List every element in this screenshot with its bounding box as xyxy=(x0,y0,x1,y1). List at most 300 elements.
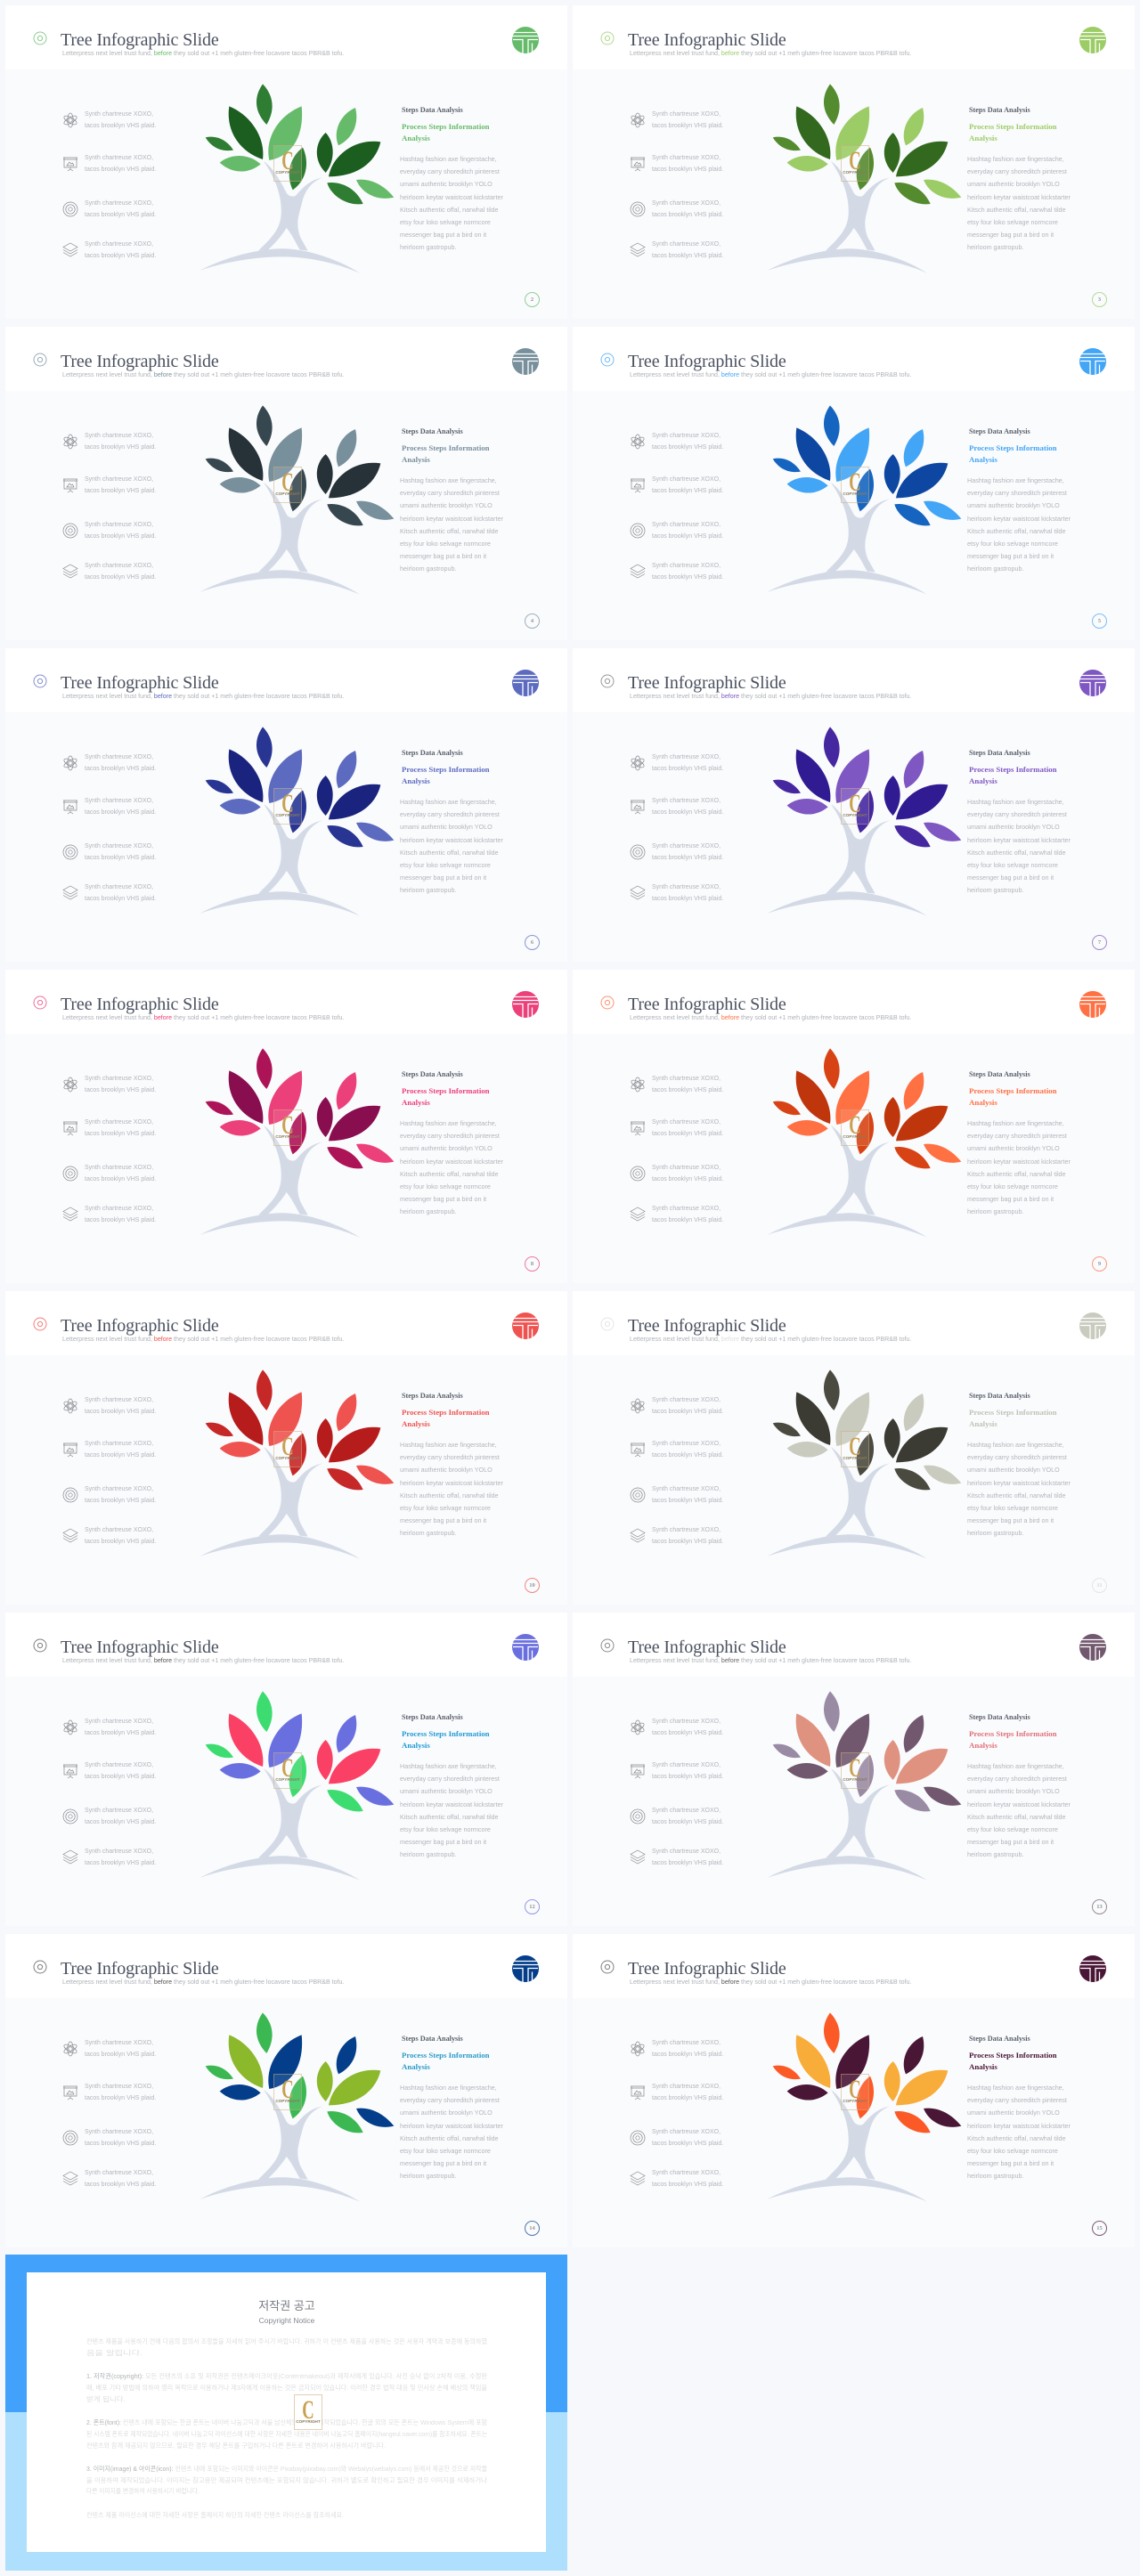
list item 4: tacos brooklyn VHS plaid. xyxy=(652,896,723,902)
list item 2: tacos brooklyn VHS plaid. xyxy=(85,809,156,816)
right text block xyxy=(967,427,1071,573)
page number xyxy=(1092,1256,1107,1272)
right text block: heirloom keytar waistcoat kickstarter xyxy=(967,193,1071,201)
right text block: etsy four loko selvage normcore xyxy=(967,540,1058,548)
right text block: Kitsch authentic offal, narwhal tilde xyxy=(400,206,499,214)
icon: target bullet xyxy=(34,675,46,687)
right text block: heirloom gastropub. xyxy=(400,1850,457,1858)
list item 4 xyxy=(62,1524,169,1548)
right text block xyxy=(967,1389,1092,1558)
right text block: Analysis xyxy=(402,134,430,142)
notice text: 컨텐츠와 함께 제공되지 않으므로, 필요한 경우 해당 폰트를 구입하거나 다른 폰트로 변경하여 사용하시기 바랍니다. xyxy=(86,2441,386,2450)
list item 2: Synth chartreuse XOXO, xyxy=(652,2084,721,2090)
list item 2: tacos brooklyn VHS plaid. xyxy=(652,488,723,494)
title: Tree Infographic Slide xyxy=(61,30,219,50)
list item 1: Synth chartreuse XOXO, xyxy=(85,2040,153,2046)
right text block: Hashtag fashion axe fingerstache, xyxy=(400,1762,497,1770)
watermark: COPYRIGHT xyxy=(275,492,300,496)
right text block: heirloom keytar waistcoat kickstarter xyxy=(400,836,503,844)
watermark xyxy=(841,1431,869,1467)
list item 4: Synth chartreuse XOXO, xyxy=(652,884,721,890)
right text block: umami authentic brooklyn YOLO xyxy=(967,1144,1060,1152)
right text block: messenger bag put a bird on it xyxy=(400,1838,486,1846)
list item 1 xyxy=(64,110,156,129)
list item 1: Synth chartreuse XOXO, xyxy=(85,1719,153,1725)
page number xyxy=(1092,292,1107,307)
icon: target bullet xyxy=(33,1960,47,1974)
list item 4 xyxy=(630,1203,737,1226)
list item 2: tacos brooklyn VHS plaid. xyxy=(85,167,156,173)
list item 2 xyxy=(630,1759,737,1783)
right text block: Process Steps Information xyxy=(402,1086,490,1095)
right text block: Process Steps Information xyxy=(402,1408,490,1417)
slide header xyxy=(573,1934,1135,1998)
list item 4: tacos brooklyn VHS plaid. xyxy=(652,2182,723,2188)
list item 2: Synth chartreuse XOXO, xyxy=(85,1762,153,1768)
slide 10 red xyxy=(5,1291,567,1605)
notice text: 3. 이미지(image) & 아이콘(icon): 컨텐츠 내에 포함되는 이미지와 아이콘은 Pixabay(pixabay.com)와 Webalys(webalys.com) 등에서 제공한 것으로 저작물 xyxy=(86,2464,487,2473)
list item 1: Synth chartreuse XOXO, xyxy=(85,433,153,439)
right text block: Analysis xyxy=(402,1098,430,1107)
subtitle: Letterpress next level trust fund, before they sold out +1 meh gluten-free locavore tacos PBR&B tofu. xyxy=(630,1657,911,1664)
list item 1: tacos brooklyn VHS plaid. xyxy=(85,766,156,772)
tree diagram xyxy=(178,1670,410,1892)
watermark: C xyxy=(281,1753,294,1783)
list item 3: tacos brooklyn VHS plaid. xyxy=(652,2141,723,2147)
right text block: umami authentic brooklyn YOLO xyxy=(967,501,1060,509)
notice text: 음을 알립니다. xyxy=(86,2349,142,2357)
slide header xyxy=(573,648,1135,712)
slide 14 green and navy xyxy=(5,1934,567,2247)
list item 2: tacos brooklyn VHS plaid. xyxy=(85,488,156,494)
list item 3: tacos brooklyn VHS plaid. xyxy=(85,1176,156,1182)
subtitle: Letterpress next level trust fund, before they sold out +1 meh gluten-free locavore tacos PBR&B tofu. xyxy=(630,1979,911,1986)
watermark xyxy=(273,1109,302,1146)
tree diagram xyxy=(745,1348,977,1571)
slide 12 multicolour xyxy=(5,1613,567,1926)
right text block: Process Steps Information xyxy=(402,1729,490,1738)
page number: 2 xyxy=(531,297,533,303)
right text block: umami authentic brooklyn YOLO xyxy=(967,2109,1060,2117)
tree diagram xyxy=(178,1991,410,2214)
list item 1 xyxy=(631,110,723,129)
list item 2: tacos brooklyn VHS plaid. xyxy=(652,2095,723,2101)
watermark: COPYRIGHT xyxy=(275,813,300,817)
right text block: Kitsch authentic offal, narwhal tilde xyxy=(967,527,1066,535)
subtitle: Letterpress next level trust fund, before they sold out +1 meh gluten-free locavore tacos PBR&B tofu. xyxy=(630,1014,911,1021)
right text block: Kitsch authentic offal, narwhal tilde xyxy=(400,849,499,857)
tree diagram xyxy=(178,1348,410,1571)
right text block: everyday carry shoreditch pinterest xyxy=(967,1775,1067,1783)
page number: 14 xyxy=(529,2225,535,2231)
list item 3 xyxy=(62,2126,169,2149)
icon: logo xyxy=(1079,27,1106,53)
page number xyxy=(1092,2221,1107,2236)
right text block: etsy four loko selvage normcore xyxy=(967,1504,1058,1512)
list item 3: Synth chartreuse XOXO, xyxy=(85,843,153,849)
right text block: Kitsch authentic offal, narwhal tilde xyxy=(967,1491,1066,1499)
icon: logo xyxy=(1079,990,1107,1019)
list item 4: Synth chartreuse XOXO, xyxy=(85,563,153,569)
right text block: Process Steps Information xyxy=(969,1086,1057,1095)
slide 5 blue xyxy=(573,327,1135,640)
list item 4: tacos brooklyn VHS plaid. xyxy=(652,1539,723,1545)
watermark: COPYRIGHT xyxy=(843,1777,867,1782)
list item 4: Synth chartreuse XOXO, xyxy=(85,884,153,890)
list item 4 xyxy=(631,240,723,259)
tree diagram xyxy=(745,1991,977,2214)
slide header xyxy=(573,5,1135,69)
list item 1: tacos brooklyn VHS plaid. xyxy=(652,1409,723,1415)
right text block: messenger bag put a bird on it xyxy=(967,231,1054,239)
list item 1: tacos brooklyn VHS plaid. xyxy=(85,123,156,129)
list item 2: Synth chartreuse XOXO, xyxy=(85,1119,153,1125)
page number: 3 xyxy=(1098,297,1101,303)
right text block: Steps Data Analysis xyxy=(969,749,1030,757)
list item 4: tacos brooklyn VHS plaid. xyxy=(652,1217,723,1223)
list item 1: tacos brooklyn VHS plaid. xyxy=(85,2052,156,2058)
title: Tree Infographic Slide xyxy=(61,673,219,693)
title: Tree Infographic Slide xyxy=(61,1637,219,1657)
right text block: Process Steps Information xyxy=(969,2051,1057,2060)
list item 4: Synth chartreuse XOXO, xyxy=(652,2170,721,2176)
list item 1: Synth chartreuse XOXO, xyxy=(85,1076,153,1082)
watermark: COPYRIGHT xyxy=(275,1777,300,1782)
page number xyxy=(525,292,540,307)
list item 4: Synth chartreuse XOXO, xyxy=(652,1206,721,1212)
right text block: heirloom keytar waistcoat kickstarter xyxy=(400,1479,503,1487)
right text block: Kitsch authentic offal, narwhal tilde xyxy=(967,2134,1066,2142)
tree diagram xyxy=(745,705,977,928)
right text block: messenger bag put a bird on it xyxy=(967,1516,1054,1524)
list item 4: Synth chartreuse XOXO, xyxy=(652,241,721,248)
list item 1: tacos brooklyn VHS plaid. xyxy=(652,2052,723,2058)
right text block: Analysis xyxy=(402,1419,430,1428)
right text block: heirloom keytar waistcoat kickstarter xyxy=(400,193,503,201)
notice text: 2. 폰트(font): 컨텐츠 내에 포함되는 한글 폰트는 네이버 나눔고딕과 서울 남산체의 서체로 제작되었습니다. 한글 외의 모든 폰트는 Windows System에 포함 xyxy=(86,2418,487,2426)
right text block: Steps Data Analysis xyxy=(969,1070,1030,1078)
right text block: everyday carry shoreditch pinterest xyxy=(967,2096,1067,2104)
right text block: heirloom keytar waistcoat kickstarter xyxy=(400,1158,503,1166)
right text block xyxy=(967,1068,1092,1237)
list item 2 xyxy=(62,1759,169,1783)
list item 3 xyxy=(62,1162,169,1185)
list item 2: Synth chartreuse XOXO, xyxy=(85,155,153,161)
right text block xyxy=(400,106,503,251)
list item 2: Synth chartreuse XOXO, xyxy=(652,1441,721,1447)
right text block: etsy four loko selvage normcore xyxy=(967,861,1058,869)
subtitle: Letterpress next level trust fund, before they sold out +1 meh gluten-free locavore tacos PBR&B tofu. xyxy=(630,1336,911,1343)
list item 4: Synth chartreuse XOXO, xyxy=(652,1849,721,1855)
watermark: C xyxy=(281,789,294,818)
watermark: C xyxy=(849,467,861,497)
right text block: heirloom gastropub. xyxy=(967,2172,1024,2180)
right text block: Analysis xyxy=(969,1741,998,1750)
right text block xyxy=(967,2032,1092,2201)
right text block: messenger bag put a bird on it xyxy=(400,1516,486,1524)
watermark: COPYRIGHT xyxy=(275,2099,300,2103)
list item 3 xyxy=(631,522,723,540)
list item 3: tacos brooklyn VHS plaid. xyxy=(85,855,156,861)
right text block: Hashtag fashion axe fingerstache, xyxy=(400,798,497,806)
notice text: 저작권 공고 xyxy=(258,2299,315,2312)
right text block: everyday carry shoreditch pinterest xyxy=(400,167,500,175)
right text block: everyday carry shoreditch pinterest xyxy=(400,1775,500,1783)
right text block: Steps Data Analysis xyxy=(402,1713,463,1721)
title: Tree Infographic Slide xyxy=(628,30,786,50)
tree diagram xyxy=(768,84,962,272)
right text block: messenger bag put a bird on it xyxy=(400,2159,486,2167)
page number xyxy=(525,2221,540,2236)
list item 4 xyxy=(631,563,723,581)
watermark xyxy=(294,2394,322,2430)
list item 4 xyxy=(630,2167,737,2190)
right text block: Analysis xyxy=(969,134,998,142)
slide 7 deep purple xyxy=(573,648,1135,962)
right text block: Analysis xyxy=(969,2062,998,2071)
right text block: heirloom keytar waistcoat kickstarter xyxy=(967,1158,1071,1166)
slide header xyxy=(5,1291,567,1355)
notice text: 받게 됩니다. xyxy=(86,2394,126,2403)
subtitle: Letterpress next level trust fund, before they sold out +1 meh gluten-free locavore tacos PBR&B tofu. xyxy=(630,693,911,700)
list item 4: tacos brooklyn VHS plaid. xyxy=(85,1217,156,1223)
title: Tree Infographic Slide xyxy=(61,352,219,371)
watermark: COPYRIGHT xyxy=(296,2419,321,2424)
list item 2 xyxy=(63,155,156,173)
slide header xyxy=(5,327,567,391)
right text block: Analysis xyxy=(969,455,998,464)
page number xyxy=(1092,935,1107,950)
right text block: heirloom gastropub. xyxy=(967,886,1024,894)
watermark xyxy=(841,1752,869,1789)
right text block: Steps Data Analysis xyxy=(402,427,463,435)
panel: copyright notice xyxy=(5,2255,567,2571)
list item 1 xyxy=(62,1394,169,1418)
list item 1: Synth chartreuse XOXO, xyxy=(652,1719,721,1725)
right text block: Steps Data Analysis xyxy=(969,2035,1030,2043)
subtitle: Letterpress next level trust fund, before they sold out +1 meh gluten-free locavore tacos PBR&B tofu. xyxy=(62,371,344,378)
list item 4 xyxy=(62,1203,169,1226)
watermark: C xyxy=(281,467,294,497)
right text block: Kitsch authentic offal, narwhal tilde xyxy=(967,1813,1066,1821)
icon: logo xyxy=(511,1954,540,1983)
slide header xyxy=(573,970,1135,1034)
list item 3: Synth chartreuse XOXO, xyxy=(652,1486,721,1492)
list item 3 xyxy=(62,522,156,540)
icon: target bullet xyxy=(33,995,47,1010)
list item 3: tacos brooklyn VHS plaid. xyxy=(85,1498,156,1504)
right text block: heirloom keytar waistcoat kickstarter xyxy=(967,836,1071,844)
list item 3: tacos brooklyn VHS plaid. xyxy=(85,1819,156,1825)
page number xyxy=(525,1256,540,1272)
right text block: Kitsch authentic offal, narwhal tilde xyxy=(400,1491,499,1499)
right text block: heirloom gastropub. xyxy=(967,1529,1024,1537)
subtitle: Letterpress next level trust fund, before they sold out +1 meh gluten-free locavore tacos PBR&B tofu. xyxy=(62,50,344,57)
page number: 6 xyxy=(531,939,533,946)
right text block: Kitsch authentic offal, narwhal tilde xyxy=(967,206,1066,214)
right text block: messenger bag put a bird on it xyxy=(967,1195,1054,1203)
list item 3 xyxy=(630,1162,737,1185)
right text block: Hashtag fashion axe fingerstache, xyxy=(400,2084,497,2092)
icon: target bullet xyxy=(34,32,46,45)
title: Tree Infographic Slide xyxy=(628,995,786,1014)
icon: logo xyxy=(512,348,539,375)
list item 3: tacos brooklyn VHS plaid. xyxy=(652,855,723,861)
list item 4 xyxy=(62,563,156,581)
slide 4 blue grey xyxy=(5,327,567,640)
right text block: Process Steps Information xyxy=(402,122,490,131)
page number: 11 xyxy=(1096,1582,1103,1589)
right text block: everyday carry shoreditch pinterest xyxy=(967,1132,1067,1140)
list item 4 xyxy=(630,882,737,905)
page number xyxy=(1092,1578,1107,1593)
list item 1: tacos brooklyn VHS plaid. xyxy=(652,766,723,772)
right text block: etsy four loko selvage normcore xyxy=(400,1182,491,1190)
right text block: Steps Data Analysis xyxy=(969,1392,1030,1400)
icon: target bullet xyxy=(600,1317,615,1331)
watermark xyxy=(273,1431,302,1467)
title: Tree Infographic Slide xyxy=(628,673,786,693)
right text block: Kitsch authentic offal, narwhal tilde xyxy=(400,527,499,535)
list item 4: Synth chartreuse XOXO, xyxy=(85,1206,153,1212)
watermark: COPYRIGHT xyxy=(843,2099,867,2103)
right text block: Kitsch authentic offal, narwhal tilde xyxy=(967,849,1066,857)
slide header xyxy=(5,1613,567,1677)
tree diagram xyxy=(178,705,410,928)
list item 2 xyxy=(63,475,156,494)
watermark: C xyxy=(281,1110,294,1140)
right text block: Hashtag fashion axe fingerstache, xyxy=(967,1762,1064,1770)
page number xyxy=(525,1899,540,1914)
tree diagram xyxy=(178,1027,410,1249)
list item 1 xyxy=(62,1716,169,1739)
right text block xyxy=(400,1711,525,1880)
slide header xyxy=(5,970,567,1034)
list item 3: tacos brooklyn VHS plaid. xyxy=(85,212,156,218)
subtitle: Letterpress next level trust fund, before they sold out +1 meh gluten-free locavore tacos PBR&B tofu. xyxy=(62,1979,344,1986)
tree diagram xyxy=(768,406,962,595)
icon: target bullet xyxy=(33,1638,47,1653)
page number xyxy=(525,935,540,950)
list item 3: Synth chartreuse XOXO, xyxy=(85,200,153,207)
right text block xyxy=(400,1068,525,1237)
right text block: Analysis xyxy=(969,776,998,785)
right text block: Steps Data Analysis xyxy=(969,1713,1030,1721)
right text block xyxy=(967,106,1071,251)
page number xyxy=(525,1578,540,1593)
right text block: Steps Data Analysis xyxy=(969,106,1030,114)
right text block xyxy=(400,427,503,573)
right text block: messenger bag put a bird on it xyxy=(967,2159,1054,2167)
list item 1: Synth chartreuse XOXO, xyxy=(85,754,153,760)
page number: 7 xyxy=(1098,939,1101,946)
slide 2 green xyxy=(5,5,567,319)
list item 2: tacos brooklyn VHS plaid. xyxy=(652,1131,723,1137)
list item 4 xyxy=(630,1524,737,1548)
icon: logo xyxy=(1079,348,1106,375)
right text block: umami authentic brooklyn YOLO xyxy=(400,180,493,188)
icon: logo xyxy=(511,1633,540,1662)
right text block: Analysis xyxy=(969,1098,998,1107)
list item 2: Synth chartreuse XOXO, xyxy=(85,2084,153,2090)
list item 1 xyxy=(62,2037,169,2060)
notice text: 컨텐츠 제품 라이선스에 대한 자세한 사항은 홈페이지 하단의 자세한 컨텐츠 라이선스를 참조하세요. xyxy=(86,2510,344,2519)
right text block: heirloom gastropub. xyxy=(400,2172,457,2180)
tree diagram xyxy=(745,1027,977,1249)
list item 4 xyxy=(62,2167,169,2190)
list item 2: tacos brooklyn VHS plaid. xyxy=(85,2095,156,2101)
list item 3 xyxy=(630,841,737,864)
list item 1: Synth chartreuse XOXO, xyxy=(652,433,721,439)
right text block: etsy four loko selvage normcore xyxy=(400,540,491,548)
slide header xyxy=(573,1613,1135,1677)
watermark: COPYRIGHT xyxy=(843,1134,867,1139)
list item 3 xyxy=(62,841,169,864)
list item 3: Synth chartreuse XOXO, xyxy=(85,522,153,528)
right text block: heirloom gastropub. xyxy=(400,565,457,573)
list item 1: Synth chartreuse XOXO, xyxy=(85,111,153,118)
list item 4 xyxy=(62,240,156,259)
list item 4: tacos brooklyn VHS plaid. xyxy=(652,1860,723,1866)
watermark: COPYRIGHT xyxy=(843,170,867,175)
right text block: Analysis xyxy=(402,1741,430,1750)
watermark: C xyxy=(281,1432,294,1461)
page number: 10 xyxy=(529,1582,535,1589)
watermark xyxy=(841,467,869,503)
right text block: Kitsch authentic offal, narwhal tilde xyxy=(400,1170,499,1178)
right text block: Process Steps Information xyxy=(969,1408,1057,1417)
list item 3: Synth chartreuse XOXO, xyxy=(652,1165,721,1171)
list item 3: tacos brooklyn VHS plaid. xyxy=(652,1498,723,1504)
tree diagram xyxy=(200,406,394,595)
right text block: Process Steps Information xyxy=(402,765,490,774)
list item 2 xyxy=(630,1438,737,1461)
right text block: messenger bag put a bird on it xyxy=(400,231,486,239)
notice text: 1. 저작권(copyright): 모든 컨텐츠의 소유 및 저작권은 컨텐츠메이크아웃(Contentmakeout)과 제작사에게 있습니다. 사전 승낙 없이 2차적 이용, 수정판 xyxy=(86,2371,487,2380)
right text block: Hashtag fashion axe fingerstache, xyxy=(400,476,497,484)
right text block: heirloom keytar waistcoat kickstarter xyxy=(400,515,503,523)
right text block: everyday carry shoreditch pinterest xyxy=(400,489,500,497)
list item 1: Synth chartreuse XOXO, xyxy=(652,1397,721,1403)
title: Tree Infographic Slide xyxy=(61,1959,219,1979)
slide 8 pink xyxy=(5,970,567,1283)
list item 3: tacos brooklyn VHS plaid. xyxy=(85,533,156,540)
right text block: umami authentic brooklyn YOLO xyxy=(400,2109,493,2117)
right text block xyxy=(967,1711,1092,1880)
icon: logo xyxy=(512,670,539,696)
right text block: Steps Data Analysis xyxy=(969,427,1030,435)
right text block: Steps Data Analysis xyxy=(402,1392,463,1400)
right text block: messenger bag put a bird on it xyxy=(400,874,486,882)
list item 1: tacos brooklyn VHS plaid. xyxy=(85,1087,156,1093)
right text block: Kitsch authentic offal, narwhal tilde xyxy=(400,2134,499,2142)
list item 3 xyxy=(631,199,723,218)
list item 2: Synth chartreuse XOXO, xyxy=(85,476,153,483)
right text block: heirloom keytar waistcoat kickstarter xyxy=(967,1479,1071,1487)
subtitle: Letterpress next level trust fund, before they sold out +1 meh gluten-free locavore tacos PBR&B tofu. xyxy=(62,1014,344,1021)
slide header xyxy=(5,5,567,69)
right text block: umami authentic brooklyn YOLO xyxy=(967,1787,1060,1795)
right text block: umami authentic brooklyn YOLO xyxy=(967,1466,1060,1474)
list item 3 xyxy=(630,1483,737,1507)
list item 3 xyxy=(62,1483,169,1507)
icon: target bullet xyxy=(33,1317,47,1331)
watermark: C xyxy=(849,1432,861,1461)
right text block: Process Steps Information xyxy=(402,2051,490,2060)
icon: logo xyxy=(511,1312,540,1340)
list item 1: tacos brooklyn VHS plaid. xyxy=(85,1730,156,1736)
right text block: umami authentic brooklyn YOLO xyxy=(400,823,493,831)
